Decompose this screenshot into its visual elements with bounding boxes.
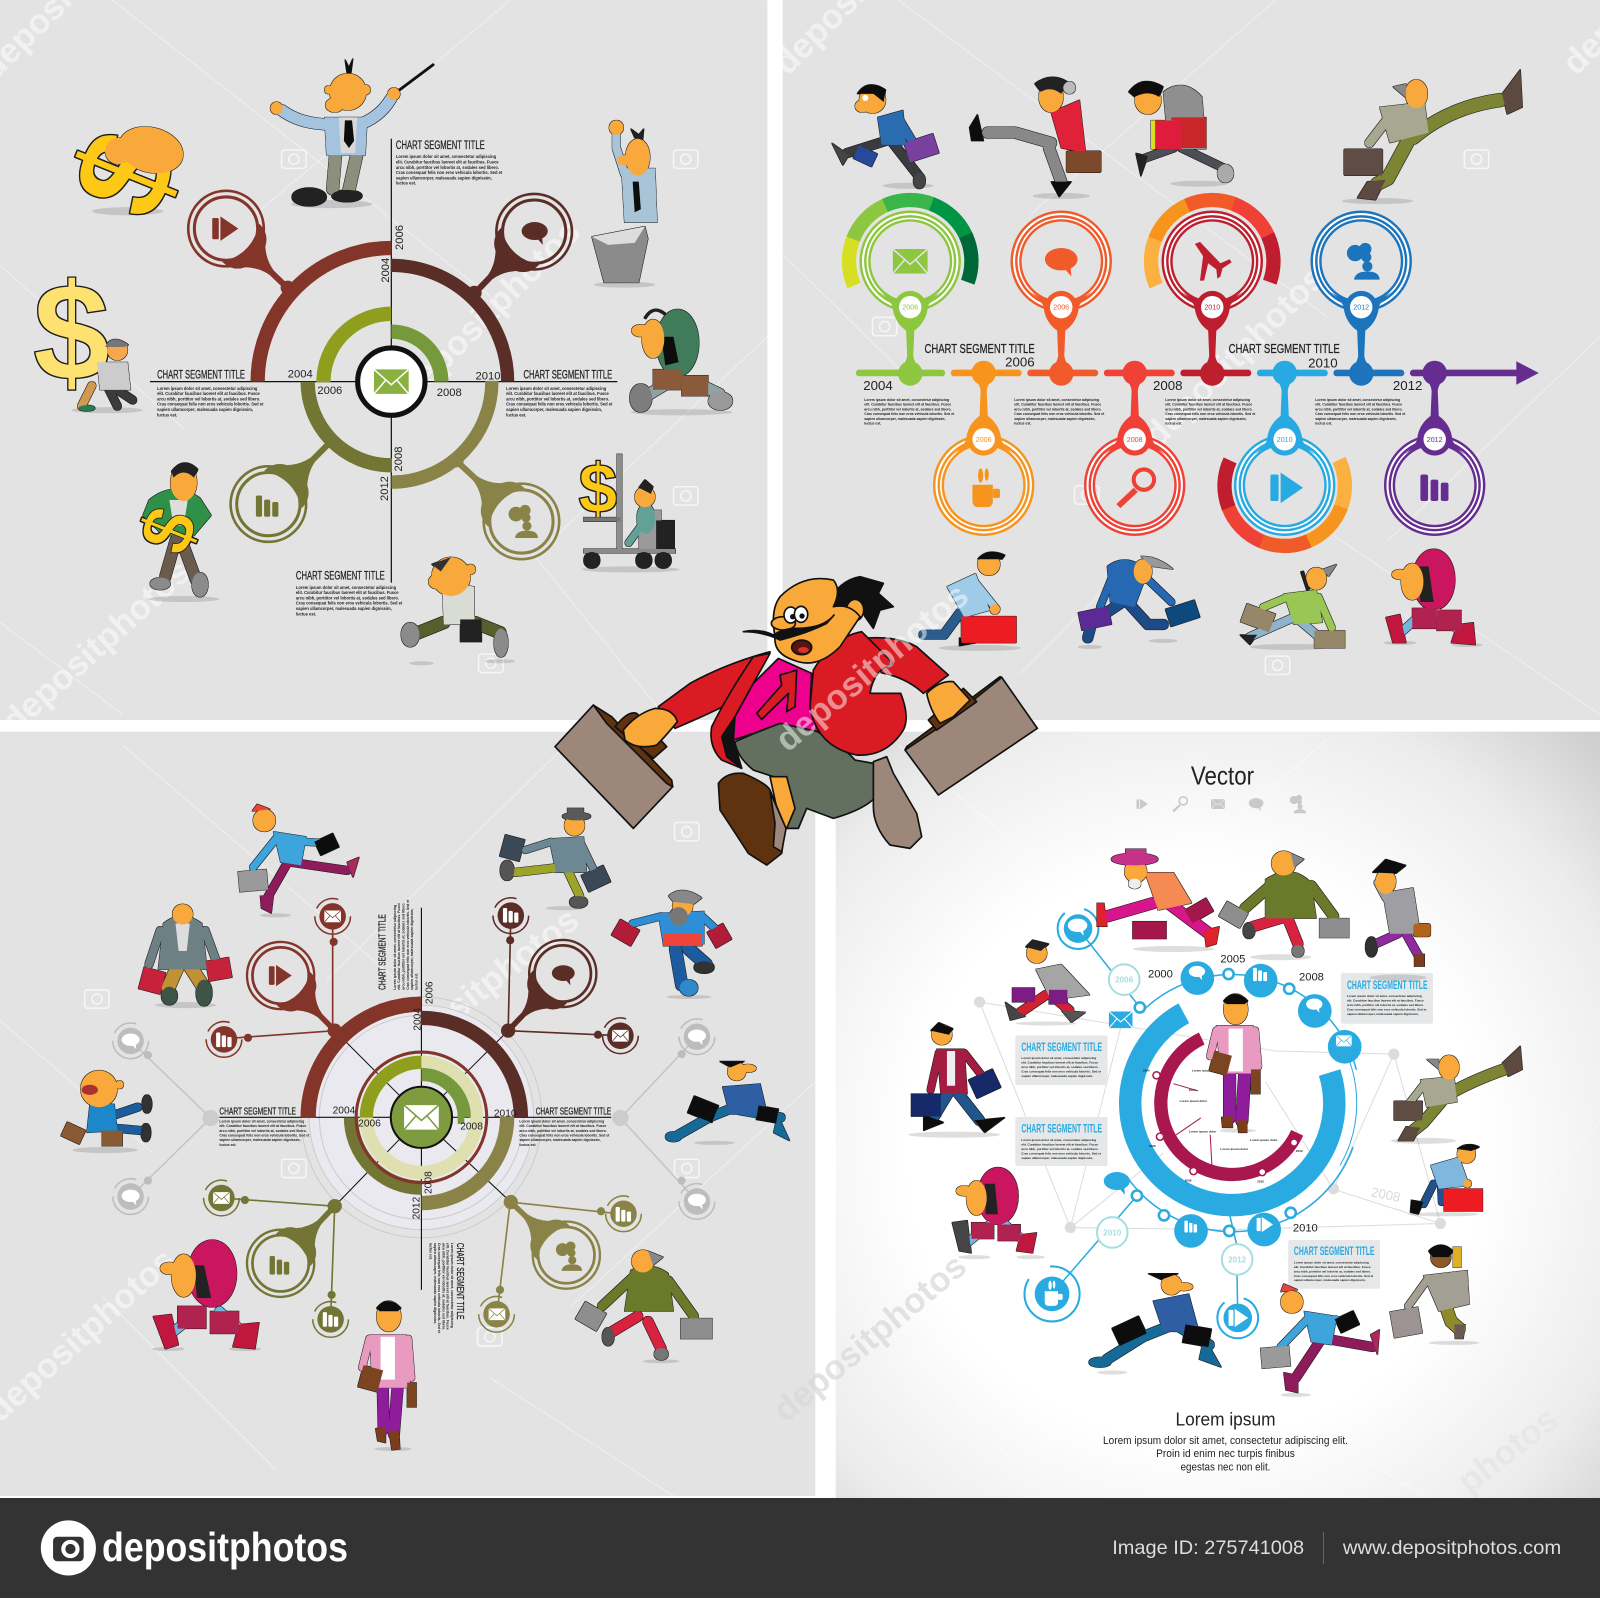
- crimson arc tiny labels: 2012: [1296, 1149, 1303, 1153]
- panel: bottom-right circular diagram: [766, 732, 1600, 1501]
- text block 2: luctus est.: [1014, 422, 1031, 426]
- segment left text: Lorem ipsum dolor sit amet, consectetur adipiscing: [219, 1119, 304, 1123]
- character: pushing red case: [1408, 1144, 1483, 1216]
- character: blue shirt crimson pants: [1260, 1284, 1380, 1397]
- year labels: 2008: [437, 387, 462, 399]
- callout boxes: sapien ullamcorper, malesuada sapien dignissim,: [1021, 1156, 1093, 1160]
- callout boxes: sapien ullamcorper, malesuada sapien dignissim,: [1021, 1074, 1093, 1078]
- panel: top-right timeline: depositphotos: [1137, 259, 1333, 455]
- text block 1: Cras consequat felis non eros vehicula lobortis. Sed et: [864, 412, 955, 416]
- segment top text: Cras consequat felis non eros vehicula lobortis. Sed et: [396, 170, 503, 175]
- callout boxes: Lorem ipsum dolor sit amet, consectetur adipiscing: [1294, 1260, 1369, 1264]
- closing text: Proin id enim nec turpis finibus: [1156, 1448, 1295, 1460]
- pin: red magnifier 2008: [1085, 361, 1184, 535]
- pin: orange bubble 2006: 2006: [1053, 304, 1069, 312]
- segment right text: sapien ullamcorper, malesuada sapien dignissim,: [519, 1138, 601, 1142]
- panel: top-left radial chart: depositphotos: [392, 213, 588, 409]
- callout boxes: elit. Curabitur faucibus laoreet elit at faucibus. Fusce: [1294, 1265, 1371, 1269]
- timeline labels: 2004: [863, 378, 893, 393]
- segment top text: CHART SEGMENT TITLE: [396, 139, 485, 152]
- segment right text: elit. Curabitur faucibus laoreet elit at faucibus. Fusce: [506, 391, 610, 396]
- segment left text: [157, 369, 264, 417]
- timeline labels: 2006: [1005, 354, 1035, 369]
- panel: top-left radial chart: depositphotos: [0, 553, 198, 741]
- year labels: 2004: [412, 1008, 423, 1031]
- crimson arc tiny labels: 2008: [1185, 1179, 1192, 1183]
- callout boxes: sapien ullamcorper, malesuada sapien dignissim,: [1294, 1278, 1366, 1282]
- character: conductor: [270, 58, 434, 208]
- callout boxes: elit. Curabitur faucibus laoreet elit at faucibus. Fusce: [1347, 998, 1424, 1002]
- top icon row: [1136, 795, 1306, 813]
- character: walking bald man: [401, 557, 515, 665]
- segment top rotated text: [378, 899, 418, 990]
- character: hat man: [499, 808, 611, 910]
- segment top text: [396, 139, 503, 186]
- segment bottom text: CHART SEGMENT TITLE: [296, 570, 385, 583]
- text block 4: sapien ullamcorper, malesuada sapien dignissim,: [1315, 417, 1397, 421]
- segment bottom rotated text: elit. Curabitur faucibus laoreet elit at faucibus. Fusce: [446, 1243, 450, 1330]
- segment right text: [519, 1106, 611, 1147]
- character: big running man with briefcases: [555, 577, 1037, 865]
- segment bottom text: [296, 570, 403, 616]
- segment top rotated text: elit. Curabitur faucibus laoreet elit at faucibus. Fusce: [397, 903, 401, 990]
- timeline labels: 2012: [1393, 378, 1422, 393]
- segment left text: luctus est.: [219, 1143, 237, 1147]
- segment right text: arcu nibh, porttitor vel lobortis at, sodales sed libero.: [506, 396, 609, 401]
- callout boxes: CHART SEGMENT TITLE: [1347, 979, 1428, 992]
- callout boxes: arcu nibh, porttitor vel lobortis at, sodales sed libero.: [1294, 1269, 1371, 1273]
- character: forklift with dollar: $: [579, 449, 617, 527]
- crimson arc tiny labels: Lorem ipsum dolor: [1189, 1130, 1217, 1134]
- year labels: 2008: [424, 1171, 435, 1194]
- callout boxes: CHART SEGMENT TITLE: [1021, 1123, 1102, 1136]
- callout boxes: arcu nibh, porttitor vel lobortis at, sodales sed libero.: [1347, 1003, 1424, 1007]
- segment right text: CHART SEGMENT TITLE: [523, 369, 612, 382]
- site url: www.depositphotos.com: [1342, 1537, 1561, 1559]
- segment top rotated text: luctus est.: [414, 973, 418, 990]
- segment left text: Cras consequat felis non eros vehicula lobortis. Sed et: [157, 402, 264, 407]
- text block 3: Lorem ipsum dolor sit amet, consectetur adipiscing: [1165, 398, 1250, 402]
- callout boxes: sapien ullamcorper, malesuada sapien dignissim,: [1347, 1012, 1419, 1016]
- year labels: [333, 981, 517, 1219]
- segment top rotated text: Lorem ipsum dolor sit amet, consectetur adipiscing: [393, 905, 397, 990]
- character: green jacket walking: [1218, 851, 1349, 960]
- pin: blue cloud 2012: 2012: [1353, 304, 1369, 312]
- text block 2: arcu nibh, porttitor vel lobortis at, sodales sed libero.: [1014, 407, 1102, 411]
- crimson arc tiny labels: 2006: [1149, 1144, 1156, 1148]
- year labels: 2005: [1220, 953, 1245, 965]
- panel: bottom-left radial chart: [0, 732, 815, 1496]
- center envelope badge: [358, 348, 425, 415]
- segment left text: CHART SEGMENT TITLE: [157, 369, 245, 382]
- character: blue suit grey hair: [1078, 556, 1200, 649]
- text block 3: Cras consequat felis non eros vehicula lobortis. Sed et: [1165, 412, 1256, 416]
- segment top rotated text: sapien ullamcorper, malesuada sapien dignissim,: [410, 909, 414, 990]
- segment bottom text: arcu nibh, porttitor vel lobortis at, sodales sed libero.: [296, 595, 399, 600]
- pin: green envelope 2006: 2006: [902, 304, 918, 312]
- segment top text: elit. Curabitur faucibus laoreet elit at faucibus. Fusce: [396, 159, 499, 164]
- pin: purple bars 2012: 2012: [1427, 436, 1443, 444]
- segmented arc: warm top: [1131, 180, 1293, 342]
- segment right text: sapien ullamcorper, malesuada sapien dignissim,: [506, 407, 602, 412]
- segment left text: Lorem ipsum dolor sit amet, consectetur adipiscing: [157, 386, 258, 391]
- connector lines: [221, 915, 623, 1319]
- character: dark face man: [1390, 1245, 1480, 1345]
- crimson arc tiny labels: 2004: [1189, 1088, 1196, 1092]
- closing text: Lorem ipsum: [1176, 1409, 1276, 1430]
- pin: orange cup 2006: [934, 361, 1033, 535]
- segment top text: luctus est.: [396, 181, 416, 186]
- center envelope badge: [391, 1087, 452, 1148]
- text block 3: arcu nibh, porttitor vel lobortis at, sodales sed libero.: [1165, 407, 1253, 411]
- text block 3: elit. Curabitur faucibus laoreet elit at faucibus. Fusce: [1165, 403, 1252, 407]
- callout boxes: arcu nibh, porttitor vel lobortis at, sodales sed libero.: [1021, 1065, 1099, 1069]
- panel: bottom-right circular diagram: photos: [1451, 1400, 1565, 1501]
- timeline labels: CHART SEGMENT TITLE: [924, 341, 1035, 356]
- character: forklift with dollar: [579, 449, 680, 572]
- character: phone man purple pants: [1365, 859, 1431, 981]
- watermark over big man: depositphotos: [768, 577, 976, 759]
- segment top text: sapien ullamcorper, malesuada sapien dignissim,: [396, 175, 492, 180]
- timeline labels: 2008: [1153, 378, 1183, 393]
- pin: red plane 2010: [1163, 212, 1262, 386]
- segment right text: luctus est.: [506, 412, 526, 417]
- chart: quarter-ring timeline: [150, 139, 617, 583]
- crimson arc nodes: [1153, 1072, 1298, 1176]
- segment top rotated text: arcu nibh, porttitor vel lobortis at, sodales sed libero.: [401, 902, 405, 990]
- network lines: [974, 997, 1446, 1233]
- character: old man kicking: [1391, 1046, 1522, 1144]
- pale year circles: 2006: [1115, 976, 1134, 985]
- character: bearded blue jacket: [611, 890, 732, 999]
- text block 3: luctus est.: [1165, 422, 1182, 426]
- segment top rotated text: CHART SEGMENT TITLE: [378, 914, 389, 990]
- character: bald blue sliding: [61, 1070, 152, 1153]
- crimson arc tiny labels: [1143, 1068, 1303, 1184]
- year labels: 2010: [476, 371, 500, 383]
- text block 3: sapien ullamcorper, malesuada sapien dignissim,: [1165, 417, 1247, 421]
- character: pink hat man: [1097, 849, 1219, 952]
- character: maroon jacket: [908, 1022, 1005, 1138]
- segment bottom rotated text: luctus est.: [429, 1243, 433, 1260]
- closing text: Lorem ipsum dolor sit amet, consectetur adipiscing elit.: [1103, 1435, 1348, 1447]
- segment bottom text: sapien ullamcorper, malesuada sapien dignissim,: [296, 606, 392, 611]
- character: man at podium: [592, 120, 657, 288]
- icon pin: speech bubble: [446, 178, 588, 321]
- segment right text: CHART SEGMENT TITLE: [536, 1106, 611, 1117]
- text block 1: Lorem ipsum dolor sit amet, consectetur adipiscing: [864, 398, 949, 402]
- segment right text: arcu nibh, porttitor vel lobortis at, sodales sed libero.: [519, 1129, 607, 1133]
- text block 4: luctus est.: [1315, 422, 1332, 426]
- callout boxes: Cras consequat felis non eros vehicula lobortis. Sed et: [1347, 1007, 1426, 1011]
- chart: rings and radial lines: [219, 908, 611, 1290]
- segment bottom rotated text: sapien ullamcorper, malesuada sapien dignissim,: [433, 1243, 437, 1324]
- year labels: 2006: [394, 225, 406, 250]
- segment right text: [506, 369, 613, 417]
- year labels: 2012: [379, 476, 391, 501]
- character: hunched green jacket: [630, 309, 733, 415]
- callout boxes: Lorem ipsum dolor sit amet, consectetur adipiscing: [1021, 1138, 1096, 1142]
- pale year circles: 2012: [1228, 1255, 1247, 1264]
- year labels: 2008: [1370, 1184, 1402, 1205]
- crimson arc tiny labels: 2004: [1143, 1068, 1150, 1072]
- panel: top-right timeline: [767, 0, 1600, 720]
- small ring nodes: [1132, 969, 1296, 1236]
- big pins: [233, 926, 614, 1311]
- callout boxes: elit. Curabitur faucibus laoreet elit at faucibus. Fusce: [1021, 1061, 1098, 1065]
- small pins: [204, 898, 641, 1337]
- text block 4: elit. Curabitur faucibus laoreet elit at faucibus. Fusce: [1315, 403, 1402, 407]
- segment bottom rotated text: Lorem ipsum dolor sit amet, consectetur adipiscing: [450, 1243, 454, 1328]
- panel: bottom-right circular diagram: depositphotos: [766, 1247, 974, 1430]
- footer bar: [0, 1498, 1600, 1598]
- segment right text: Cras consequat felis non eros vehicula lobortis. Sed et: [506, 402, 613, 407]
- segment bottom text: Lorem ipsum dolor sit amet, consectetur adipiscing: [296, 585, 397, 590]
- character: green shirt walker: [1240, 564, 1345, 650]
- character: blue shirt crimson pants: [238, 804, 359, 917]
- segment top text: arcu nibh, porttitor vel lobortis at, sodales sed libero.: [396, 165, 499, 170]
- text block 1: arcu nibh, porttitor vel lobortis at, sodales sed libero.: [864, 407, 952, 411]
- logo: camera badge: [41, 1520, 96, 1576]
- character: pink hunched: [1384, 549, 1483, 647]
- image id: Image ID: 275741008: [1112, 1537, 1304, 1559]
- text block 2: Cras consequat felis non eros vehicula lobortis. Sed et: [1014, 412, 1105, 416]
- segment right text: Cras consequat felis non eros vehicula lobortis. Sed et: [519, 1134, 610, 1138]
- character: green jacket red pants: [575, 1250, 712, 1363]
- callout boxes: Cras consequat felis non eros vehicula lobortis. Sed et: [1294, 1274, 1373, 1278]
- segment left text: arcu nibh, porttitor vel lobortis at, sodales sed libero.: [157, 396, 260, 401]
- year labels: 2004: [380, 258, 392, 283]
- chart: blue and crimson rings: [1050, 921, 1414, 1317]
- segment right text: luctus est.: [519, 1143, 537, 1147]
- segment left text: CHART SEGMENT TITLE: [219, 1106, 296, 1117]
- segment bottom rotated text: [429, 1243, 465, 1334]
- callout boxes: Lorem ipsum dolor sit amet, consectetur adipiscing: [1021, 1056, 1096, 1060]
- text block 4: Cras consequat felis non eros vehicula lobortis. Sed et: [1315, 412, 1406, 416]
- text block 4: arcu nibh, porttitor vel lobortis at, sodales sed libero.: [1315, 407, 1403, 411]
- character: blue jacket runner: [832, 85, 939, 189]
- logo wordmark: depositphotos: [102, 1524, 348, 1570]
- crimson arc tiny labels: Lorem ipsum dolor: [1250, 1138, 1278, 1142]
- segment left text: elit. Curabitur faucibus laoreet elit at faucibus. Fusce: [219, 1124, 306, 1128]
- text block 2: elit. Curabitur faucibus laoreet elit at faucibus. Fusce: [1014, 403, 1101, 407]
- icon pin: cloud person: [431, 434, 575, 575]
- callout boxes: CHART SEGMENT TITLE: [1294, 1245, 1375, 1258]
- segment top text: Lorem ipsum dolor sit amet, consectetur adipiscing: [396, 154, 497, 159]
- character: seated man with big dollar: $: [33, 256, 110, 410]
- character: pink jacket purple pants center: [1209, 994, 1260, 1133]
- character: blue running: [1089, 1273, 1221, 1375]
- text block 1: luctus est.: [864, 422, 881, 426]
- callout boxes: CHART SEGMENT TITLE: [1021, 1041, 1102, 1054]
- panel: bottom-left radial chart: depositphotos: [374, 901, 586, 1078]
- year labels: 2004: [333, 1105, 356, 1116]
- pin: cyan play 2010: 2010: [1277, 436, 1293, 444]
- crimson arc tiny labels: Lorem ipsum dolor: [1192, 1068, 1220, 1072]
- character: seated man with big dollar: [33, 256, 143, 413]
- character: pushing red case: [923, 552, 1020, 651]
- character: red shirt on phone: [969, 77, 1101, 199]
- icon pin: bars: [215, 415, 357, 557]
- segment bottom rotated text: CHART SEGMENT TITLE: [454, 1243, 465, 1320]
- segment bottom rotated text: arcu nibh, porttitor vel lobortis at, sodales sed libero.: [441, 1243, 445, 1330]
- timeline arrow: [859, 361, 1539, 385]
- character: green jacket carrying dollar: $: [122, 496, 214, 565]
- closing text: egestas nec non elit.: [1181, 1461, 1270, 1473]
- segment bottom text: luctus est.: [296, 611, 316, 616]
- pin: red plane 2010: 2010: [1204, 304, 1220, 312]
- year labels: 2008: [393, 446, 405, 471]
- grey pins: [113, 1019, 715, 1219]
- year labels: 2008: [460, 1122, 483, 1133]
- text block 4: Lorem ipsum dolor sit amet, consectetur adipiscing: [1315, 398, 1400, 402]
- character: man on dollar sign: $: [43, 112, 208, 236]
- character: pink hunched: [152, 1240, 261, 1351]
- pin: green envelope 2006: [861, 212, 960, 386]
- segment left text: sapien ullamcorper, malesuada sapien dignissim,: [157, 407, 253, 412]
- character: blue running right: [665, 1061, 790, 1145]
- pale year circles: [1097, 964, 1252, 1275]
- blue ring pins: [1024, 908, 1258, 1338]
- segment right text: Lorem ipsum dolor sit amet, consectetur adipiscing: [519, 1119, 604, 1123]
- year labels: 2006: [425, 981, 436, 1004]
- blue icon circles: [1174, 961, 1362, 1248]
- timeline labels: 2010: [1308, 355, 1338, 370]
- icon pin: play: [173, 175, 315, 317]
- callout boxes: arcu nibh, porttitor vel lobortis at, sodales sed libero.: [1021, 1147, 1099, 1151]
- segment top rotated text: Cras consequat felis non eros vehicula lobortis. Sed et: [406, 899, 410, 990]
- character: old man kicking: [1342, 69, 1522, 204]
- segment right text: Lorem ipsum dolor sit amet, consectetur adipiscing: [506, 386, 607, 391]
- segmented arc: warm bottom: [1205, 406, 1365, 566]
- timeline labels: CHART SEGMENT TITLE: [1229, 341, 1340, 356]
- pin: red magnifier 2008: 2008: [1127, 436, 1143, 444]
- pin: purple bars 2012: [1385, 361, 1484, 535]
- segment left text: [219, 1106, 310, 1147]
- segment left text: Cras consequat felis non eros vehicula lobortis. Sed et: [219, 1134, 310, 1138]
- callout boxes: Cras consequat felis non eros vehicula lobortis. Sed et: [1021, 1151, 1101, 1155]
- pale year circles: 2010: [1103, 1229, 1122, 1238]
- segment bottom text: elit. Curabitur faucibus laoreet elit at faucibus. Fusce: [296, 590, 399, 595]
- crimson arc tiny labels: Lorem ipsum dolor: [1220, 1147, 1249, 1151]
- segment right text: elit. Curabitur faucibus laoreet elit at faucibus. Fusce: [519, 1124, 606, 1128]
- pin: orange cup 2006: 2006: [976, 436, 992, 444]
- character: pink hunched: [952, 1167, 1045, 1259]
- character: grey jacket red pants: [1005, 940, 1090, 1026]
- callout boxes: Lorem ipsum dolor sit amet, consectetur adipiscing: [1347, 994, 1422, 998]
- year labels: [1148, 953, 1402, 1235]
- segment bottom rotated text: Cras consequat felis non eros vehicula lobortis. Sed et: [437, 1243, 441, 1334]
- year labels: 2010: [1293, 1223, 1318, 1235]
- year labels: 2006: [317, 385, 342, 397]
- year labels: 2010: [494, 1108, 517, 1119]
- callout boxes: elit. Curabitur faucibus laoreet elit at faucibus. Fusce: [1021, 1142, 1098, 1146]
- pin: blue cloud 2012: [1312, 212, 1411, 386]
- crimson arc tiny labels: Lorem ipsum dolor: [1180, 1099, 1208, 1103]
- segment left text: sapien ullamcorper, malesuada sapien dignissim,: [219, 1138, 301, 1142]
- character: pink jacket purple pants: [358, 1301, 416, 1451]
- crimson arc tiny labels: 2010: [1257, 1180, 1264, 1184]
- year labels: 2012: [411, 1196, 422, 1219]
- callout boxes: [1015, 973, 1433, 1289]
- title: Vector: [1191, 763, 1255, 791]
- segment left text: elit. Curabitur faucibus laoreet elit at faucibus. Fusce: [157, 391, 261, 396]
- segment left text: arcu nibh, porttitor vel lobortis at, sodales sed libero.: [219, 1129, 307, 1133]
- year labels: [288, 225, 500, 501]
- closing text: [1103, 1409, 1348, 1473]
- text block 2: sapien ullamcorper, malesuada sapien dignissim,: [1014, 417, 1096, 421]
- segment left text: luctus est.: [157, 412, 177, 417]
- callout boxes: Cras consequat felis non eros vehicula lobortis. Sed et: [1021, 1070, 1101, 1074]
- panel: top-left radial chart: [0, 0, 767, 741]
- character: green jacket carrying dollar: [122, 463, 219, 602]
- year labels: 2006: [358, 1119, 381, 1130]
- timeline labels: [863, 341, 1422, 393]
- year labels: 2008: [1299, 972, 1324, 984]
- segmented arc: green: [829, 180, 991, 342]
- text block 1: sapien ullamcorper, malesuada sapien dignissim,: [864, 417, 946, 421]
- text block 2: Lorem ipsum dolor sit amet, consectetur adipiscing: [1014, 398, 1099, 402]
- text block 1: elit. Curabitur faucibus laoreet elit at faucibus. Fusce: [864, 403, 951, 407]
- pin: orange bubble 2006: [1012, 212, 1111, 386]
- character: grey hunched with red bag: [1129, 81, 1234, 187]
- year labels: 2004: [288, 369, 313, 381]
- pin: cyan play 2010: [1235, 361, 1334, 535]
- segment bottom text: Cras consequat felis non eros vehicula lobortis. Sed et: [296, 601, 403, 606]
- character: faceless grey suit: [138, 904, 232, 1008]
- year labels: 2000: [1148, 969, 1173, 981]
